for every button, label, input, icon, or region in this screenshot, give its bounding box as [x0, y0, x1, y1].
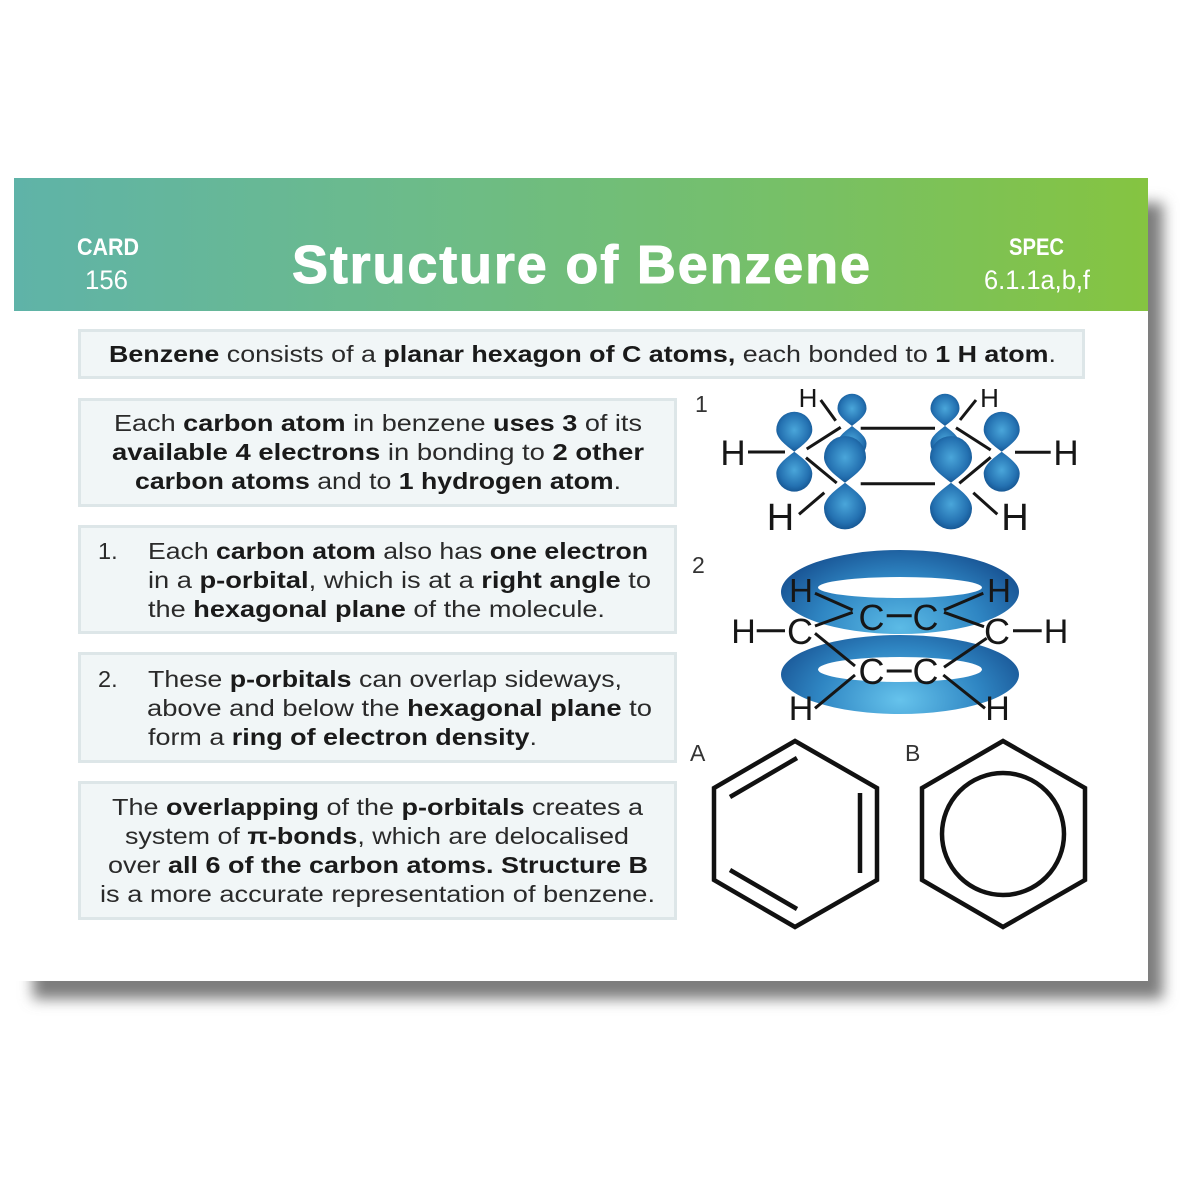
- text box: delocalisation: [80, 782, 676, 918]
- intro text box: Benzene consists of a planar hexagon of C atoms, each bonded to 1 H atom .: [109, 341, 1056, 367]
- hydrogen labels: H: [1001, 497, 1029, 539]
- text box: point 1: the hexagonal plane of the molecule.: [148, 596, 605, 622]
- hydrogen labels: H: [767, 497, 794, 539]
- card number: 156: [85, 265, 128, 295]
- text box: delocalisation: system of π-bonds , which are delocalised: [125, 823, 629, 849]
- text box: carbon bonding: [80, 400, 676, 506]
- text box: carbon bonding: Each carbon atom in benzene uses 3 of its: [114, 410, 642, 436]
- text box: delocalisation: is a more accurate representation of benzene.: [100, 881, 655, 907]
- atom labels: C: [984, 611, 1010, 652]
- text box: point 1: [80, 526, 676, 632]
- label 2: 2: [692, 552, 705, 578]
- atom labels: C: [912, 651, 938, 692]
- upper ring: [781, 550, 1019, 634]
- atom labels: C: [858, 597, 884, 638]
- text box: point 2: These p-orbitals can overlap sideways,: [148, 666, 622, 692]
- card number: [77, 234, 139, 295]
- atom labels: H: [731, 613, 756, 651]
- structure B: delocalised hexagon: [922, 741, 1085, 927]
- header band: [14, 178, 1148, 311]
- text box: delocalisation: over all 6 of the carbon atoms. Structure B: [108, 852, 648, 878]
- hydrogen labels: H: [1053, 434, 1079, 473]
- text box: point 2: [80, 654, 676, 762]
- spec reference: 6.1.1a,b,f: [984, 265, 1090, 295]
- atom labels: H: [789, 572, 813, 609]
- card number: CARD: [77, 234, 139, 261]
- atom labels: [731, 572, 1068, 728]
- atom labels: H: [789, 690, 813, 728]
- card: [14, 178, 1148, 981]
- structure A: Kekulé hexagon: [714, 741, 877, 927]
- text box: point 2: form a ring of electron density .: [148, 724, 537, 750]
- intro text box: [80, 330, 1084, 378]
- diagram 1: p-orbitals: [720, 383, 1079, 539]
- hydrogen labels: H: [799, 383, 817, 413]
- card drop shadow: [33, 203, 1163, 999]
- text box: carbon bonding: carbon atoms and to 1 hydrogen atom .: [135, 468, 621, 494]
- atom labels: C: [912, 597, 938, 638]
- atom labels: C: [787, 611, 813, 652]
- text box: carbon bonding: available 4 electrons in bonding to 2 other: [112, 439, 644, 465]
- diagram 2: electron density rings: [731, 550, 1068, 728]
- hydrogen labels: H: [720, 434, 746, 473]
- spec reference: [984, 234, 1090, 295]
- text box: point 1: in a p-orbital , which is at a right angle to: [148, 567, 651, 593]
- atom labels: H: [985, 690, 1010, 728]
- label 1: 1: [695, 391, 708, 417]
- text box: point 2: 2.: [98, 666, 118, 692]
- bonds: [748, 400, 1051, 514]
- text box: point 1: Each carbon atom also has one electron: [148, 538, 648, 564]
- title: Structure of Benzene: [292, 235, 870, 295]
- hydrogen labels: H: [980, 383, 999, 413]
- hydrogen labels: [720, 383, 1079, 539]
- atom labels: C: [858, 651, 884, 692]
- spec reference: SPEC: [1009, 234, 1064, 261]
- bonds: [757, 593, 1042, 708]
- orbital lobes: [776, 394, 1020, 529]
- lower ring: [781, 635, 1019, 714]
- label B: B: [905, 740, 920, 766]
- text box: point 1: 1.: [98, 538, 118, 564]
- label A: A: [690, 740, 706, 766]
- text box: point 2: above and below the hexagonal plane to: [147, 695, 652, 721]
- atom labels: H: [1044, 613, 1068, 651]
- text box: delocalisation: The overlapping of the p-orbitals creates a: [112, 794, 644, 820]
- atom labels: H: [987, 572, 1011, 609]
